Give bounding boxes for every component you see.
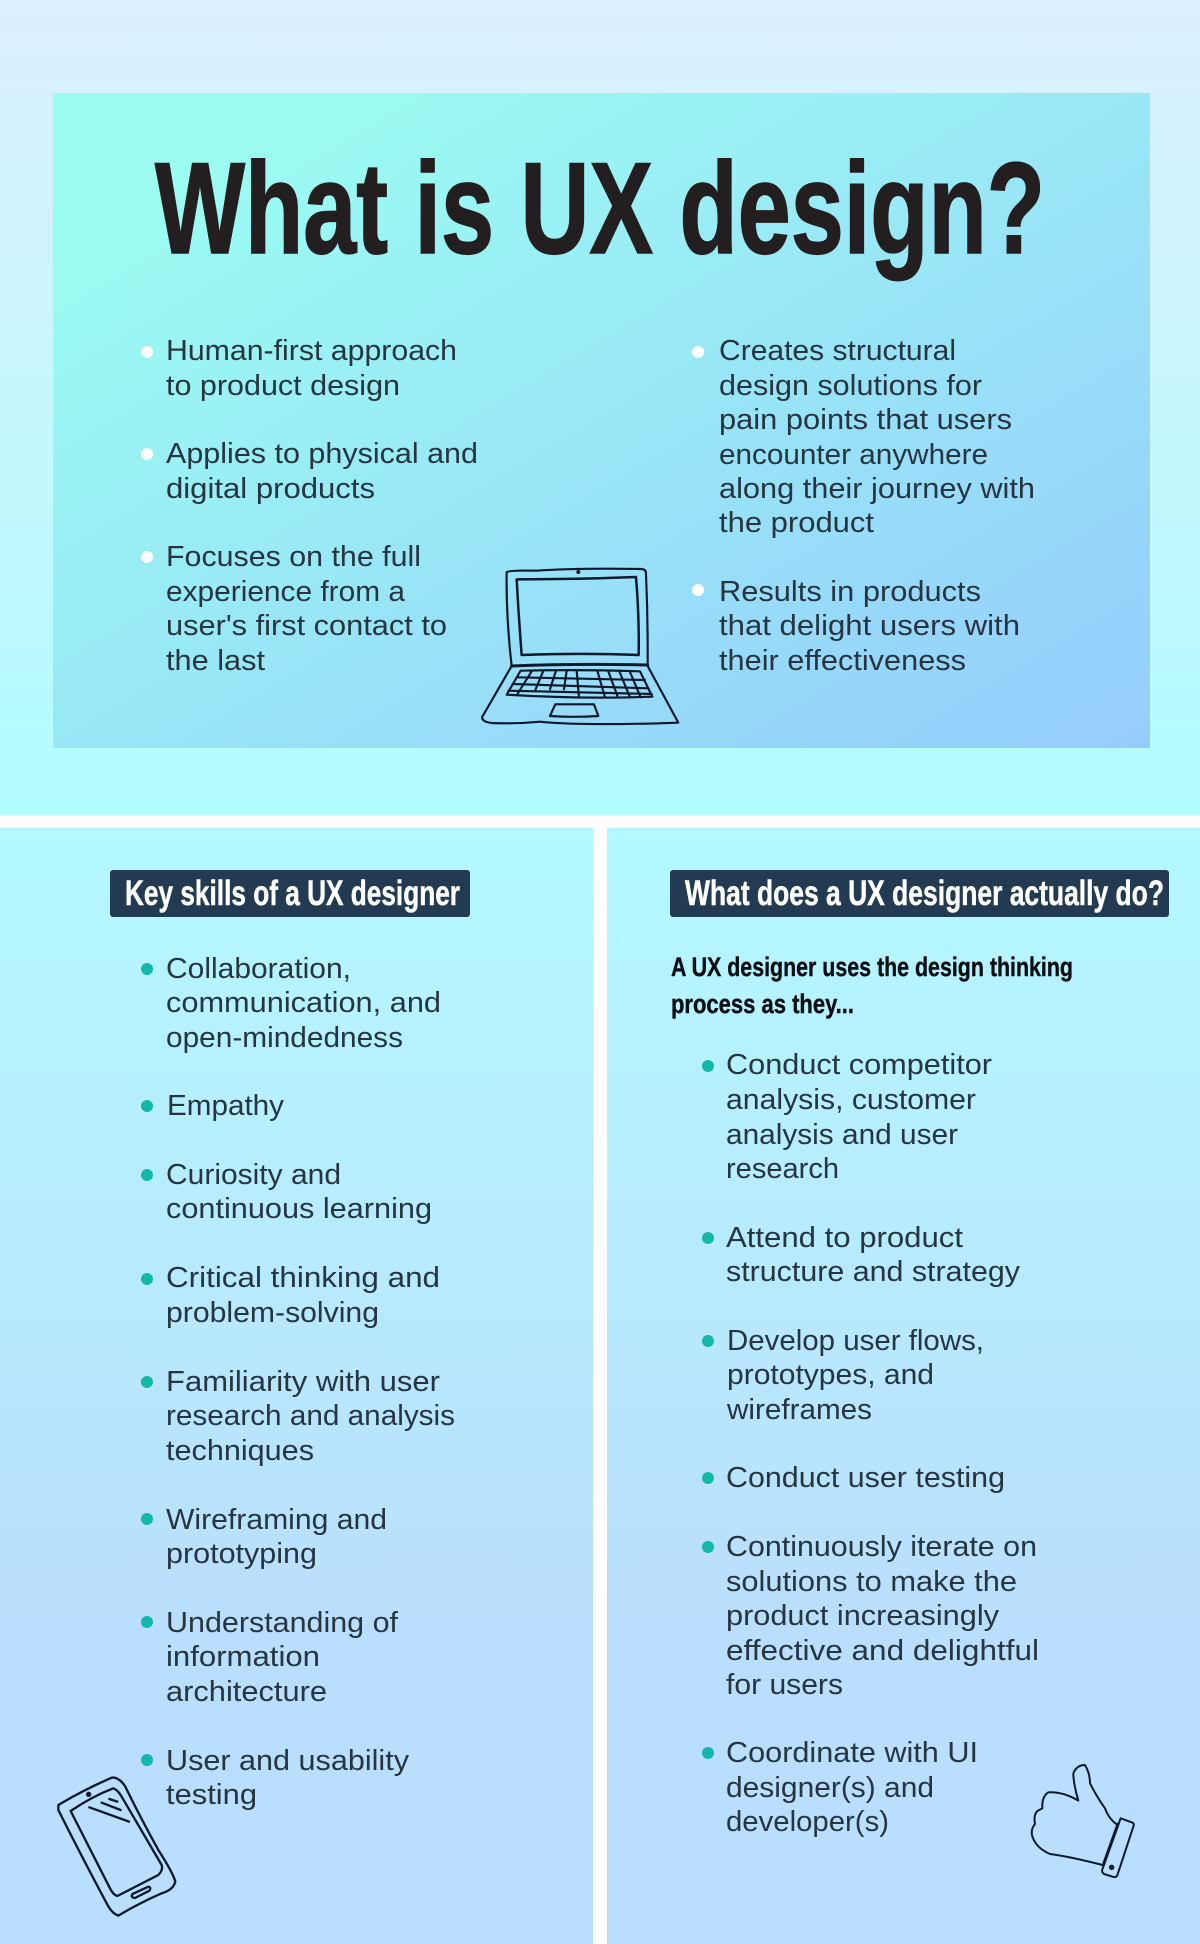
bullet list: definition right column: their effectiveness (719, 645, 966, 677)
bullet list: skills: Empathy (167, 1090, 285, 1122)
panel: what is UX design (53, 93, 1150, 748)
bullet list: activities: for users (726, 1669, 843, 1701)
bullet list: skills: problem-solving (166, 1297, 379, 1329)
bullet list: definition right column: Results in products (719, 576, 981, 608)
bullet list: skills: Critical thinking and (166, 1262, 440, 1294)
intro text: A UX designer uses the design thinking (671, 952, 1073, 982)
bullet list: skills: continuous learning (166, 1193, 432, 1225)
icon: thumbs up (1032, 1765, 1134, 1877)
bullet list: skills: architecture (166, 1676, 327, 1708)
bullet list: skills: research and analysis (166, 1400, 455, 1432)
bullet list: skills: Wireframing and (166, 1504, 387, 1536)
bullet list: skills: User and usability (166, 1745, 410, 1777)
bullet list: activities: analysis, customer (726, 1084, 976, 1116)
bullet list: skills: open-mindedness (166, 1022, 403, 1054)
panel: what a UX designer does (607, 828, 1200, 1944)
bullet list: activities: Continuously iterate on (726, 1531, 1037, 1563)
icon: smartphone (58, 1778, 175, 1916)
bullet list: definition left column: user's first contact to (166, 610, 447, 642)
bullet list: activities: prototypes, and (727, 1359, 934, 1391)
bullet list: definition right column: that delight users with (719, 610, 1020, 642)
bullet list: definition right column (692, 335, 1035, 677)
bullet list: definition right column: pain points that users (719, 404, 1012, 436)
bullet list: activities (702, 1049, 1039, 1838)
bullet list: activities: product increasingly (726, 1600, 1000, 1632)
bullet list: activities: structure and strategy (726, 1256, 1021, 1288)
bullet list: activities: Coordinate with UI (726, 1737, 978, 1769)
page background: top section (0, 0, 1200, 815)
bullet list: definition left column: Focuses on the full (166, 541, 421, 573)
bullet list: definition right column: along their journey with (719, 473, 1035, 505)
bullet list: activities: Attend to product (726, 1222, 963, 1254)
bullet list: skills: Familiarity with user (166, 1366, 440, 1398)
intro text: process as they... (671, 989, 854, 1019)
bullet list: skills (141, 953, 455, 1811)
heading: key skills (110, 870, 470, 917)
bullet list: definition right column: Creates structural (719, 335, 956, 367)
bullet list: definition left column: the last (166, 645, 265, 677)
bullet list: activities: research (726, 1153, 839, 1185)
bullet list: definition left column: Applies to physical and (166, 438, 478, 470)
bullet list: activities: effective and delightful (726, 1635, 1039, 1667)
bullet list: skills: testing (166, 1779, 257, 1811)
intro text (671, 952, 1073, 1019)
bullet list: skills: information (166, 1641, 320, 1673)
bullet list: definition left column (141, 335, 478, 677)
bullet list: skills: prototyping (166, 1538, 317, 1570)
bullet list: definition right column: design solutions for (719, 370, 982, 402)
bullet list: activities: wireframes (726, 1394, 872, 1426)
bullet list: definition left column: Human-first approach (166, 335, 457, 367)
bullet list: definition left column: to product design (166, 370, 400, 402)
bullet list: definition right column: the product (719, 507, 874, 539)
bullet list: skills: techniques (166, 1435, 314, 1467)
heading: key skills: Key skills of a UX designer (125, 874, 460, 913)
bullet list: definition left column: digital products (166, 473, 375, 505)
bullet list: skills: Understanding of (166, 1607, 399, 1639)
bullet list: activities: Conduct competitor (726, 1049, 992, 1081)
bullet list: activities: Develop user flows, (727, 1325, 984, 1357)
bullet list: definition right column: encounter anywhere (719, 439, 988, 471)
bullet list: activities: developer(s) (726, 1806, 889, 1838)
bullet list: definition left column: experience from a (166, 576, 406, 608)
bullet list: activities: analysis and user (726, 1119, 958, 1151)
bullet list: skills: communication, and (166, 987, 441, 1019)
bullet list: activities: solutions to make the (726, 1566, 1017, 1598)
bullet list: skills: Curiosity and (166, 1159, 341, 1191)
bullet list: activities: designer(s) and (726, 1772, 934, 1804)
panel: key skills (0, 828, 593, 1944)
bullet list: activities: Conduct user testing (726, 1462, 1005, 1494)
bullet list: skills: Collaboration, (166, 953, 351, 985)
icon: laptop (482, 569, 678, 724)
